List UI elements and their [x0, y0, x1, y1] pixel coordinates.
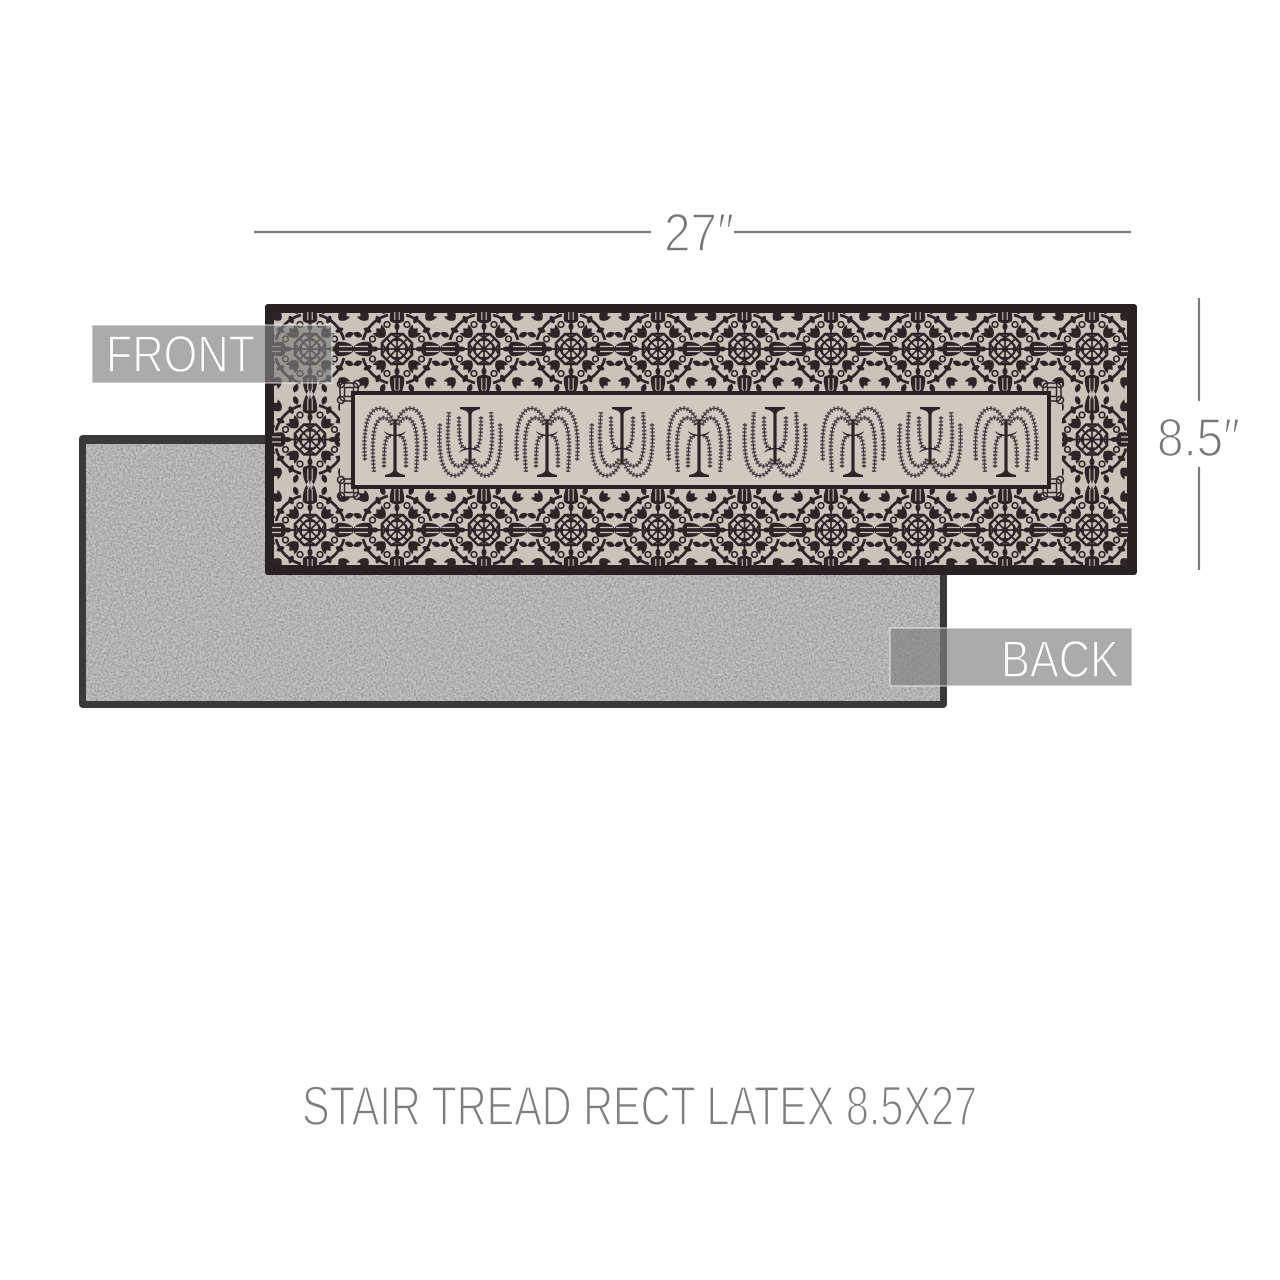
label: BACK: BACK: [1001, 631, 1119, 689]
medallion pattern border: [266, 304, 1136, 575]
label: BACK: [890, 628, 1132, 689]
dimension: height 8.5 inches: 8.5″: [1157, 408, 1240, 468]
caption: STAIR TREAD RECT LATEX 8.5X27: [302, 1074, 977, 1137]
dimension: width 27 inches: 27″: [664, 203, 734, 263]
rug: back side: [79, 435, 947, 708]
label: FRONT: FRONT: [106, 326, 255, 384]
center panel with willow trees: [353, 393, 1049, 487]
rug: front side: [265, 304, 1137, 575]
